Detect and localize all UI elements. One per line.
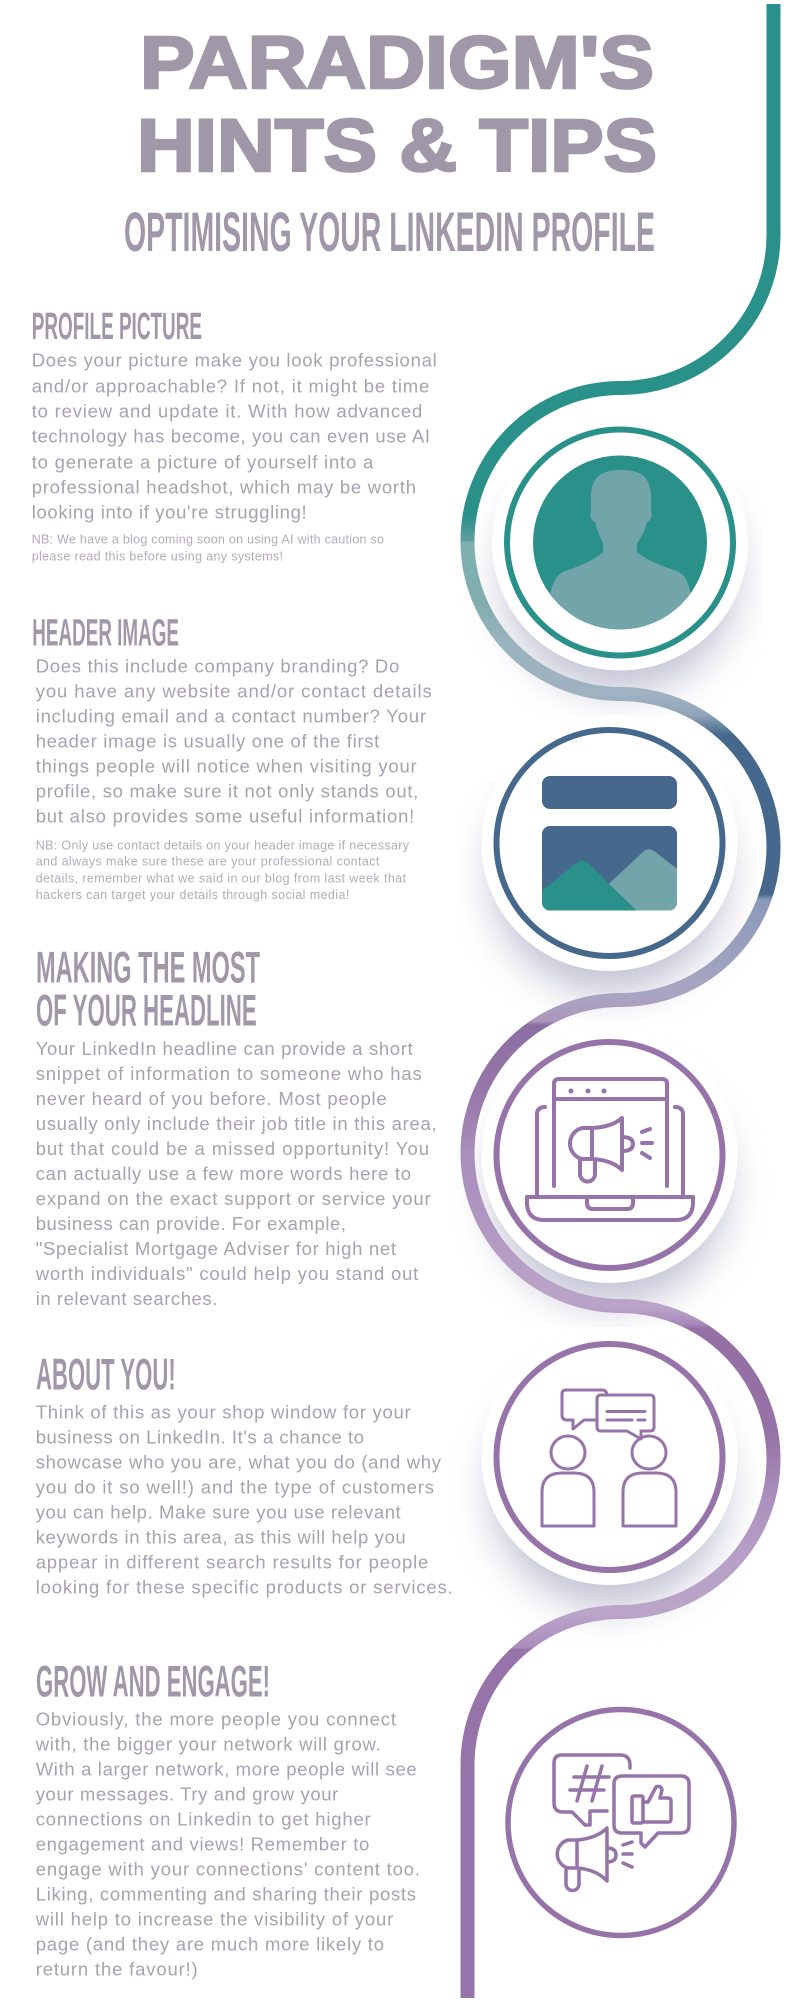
body text: grow and engage: with, the bigger your network will grow. <box>35 1734 381 1755</box>
body text: about you: keywords in this area, as this will help you <box>36 1526 406 1547</box>
body text: header image: you have any website and/or contact details <box>36 680 432 701</box>
body text: headline: can actually use a few more words here to <box>36 1163 411 1184</box>
body text: profile picture: professional headshot, which may be worth <box>32 476 416 497</box>
winding path <box>468 4 774 1998</box>
body text: grow and engage: will help to increase the visibility of your <box>35 1909 393 1930</box>
note: profile picture: NB: We have a blog coming soon on using AI with caution so <box>32 532 384 546</box>
panel: about you text <box>36 1350 453 1597</box>
panel: headline text <box>35 943 437 1309</box>
body text: header image: header image is usually one of the first <box>36 730 379 751</box>
body text: header image: but also provides some useful information! <box>36 805 414 826</box>
body text: profile picture: technology has become, you can even use AI <box>32 426 430 447</box>
body text: about you <box>36 1401 453 1597</box>
body text: about you: business on LinkedIn. It's a chance to <box>36 1426 364 1447</box>
body text: header image: including email and a contact number? Your <box>36 705 426 726</box>
body text: profile picture <box>32 350 437 522</box>
note: header image: details, remember what we said in our blog from last week that <box>36 871 407 885</box>
note: header image: NB: Only use contact details on your header image if necessary <box>36 838 410 852</box>
body text: grow and engage: Liking, commenting and sharing their posts <box>36 1884 416 1905</box>
icon: laptop with megaphone badge <box>482 1027 738 1283</box>
body text: headline: expand on the exact support or service your <box>36 1188 431 1209</box>
note: header image: and always make sure these are your professional contact <box>36 855 380 869</box>
body text: grow and engage: Obviously, the more people you connect <box>36 1709 396 1730</box>
body text: profile picture: to review and update it. With how advanced <box>32 400 422 421</box>
body text: grow and engage: your messages. Try and grow your <box>36 1784 338 1805</box>
panel: profile picture text: PROFILE PICTURE <box>32 306 202 348</box>
body text: headline: business can provide. For example, <box>36 1213 346 1234</box>
body text: headline: snippet of information to someone who has <box>36 1063 422 1084</box>
note: profile picture <box>32 532 384 563</box>
title <box>137 21 657 187</box>
panel: grow and engage text: GROW AND ENGAGE! <box>36 1658 270 1707</box>
title: HINTS & TIPS <box>137 104 657 187</box>
body text: profile picture: looking into if you're struggling! <box>32 501 307 522</box>
title: PARADIGM'S <box>140 21 654 104</box>
body text: headline: but that could be a missed opportunity! You <box>36 1138 429 1159</box>
body text: grow and engage: page (and they are much more likely to <box>36 1934 384 1955</box>
icon: profile silhouette badge <box>492 414 748 670</box>
panel: profile picture text <box>32 306 437 563</box>
body text: about you: looking for these specific products or services. <box>36 1576 453 1597</box>
body text: headline: never heard of you before. Most people <box>36 1088 387 1109</box>
heading: making the most of your headline: MAKING THE MOST <box>36 943 260 992</box>
panel: grow and engage text <box>35 1658 420 1980</box>
body text: grow and engage: With a larger network, more people will see <box>36 1759 417 1780</box>
note: profile picture: please read this before using any systems! <box>32 549 283 563</box>
disc shadows <box>492 456 738 1607</box>
icon: social engagement badge <box>508 1710 734 1936</box>
body text: grow and engage: connections on Linkedin to get higher <box>36 1809 371 1830</box>
body text: headline: worth individuals" could help you stand out <box>35 1263 418 1284</box>
body text: profile picture: to generate a picture of yourself into a <box>32 451 374 472</box>
panel: header image text <box>32 613 432 902</box>
body text: about you: Think of this as your shop window for your <box>36 1401 411 1422</box>
panel: header image text: HEADER IMAGE <box>32 613 179 655</box>
body text: grow and engage: return the favour!) <box>36 1959 198 1980</box>
body text: headline: usually only include their job title in this area, <box>36 1113 437 1134</box>
heading: making the most of your headline <box>36 943 260 1036</box>
icon: header image badge <box>482 715 738 971</box>
icon: two people talking badge <box>482 1329 738 1585</box>
body text: headline: "Specialist Mortgage Adviser for high net <box>36 1238 396 1259</box>
note: header image: hackers can target your details through social media! <box>36 888 349 902</box>
body text: grow and engage: engage with your connections' content too. <box>36 1859 420 1880</box>
body text: header image: things people will notice when visiting your <box>36 755 417 776</box>
note: header image <box>36 838 410 902</box>
body text: headline <box>35 1038 437 1309</box>
body text: about you: you can help. Make sure you use relevant <box>36 1501 401 1522</box>
body text: header image: Does this include company branding? Do <box>36 655 399 676</box>
heading: making the most of your headline: OF YOUR HEADLINE <box>36 987 257 1036</box>
body text: grow and engage <box>35 1709 420 1980</box>
panel: about you text: ABOUT YOU! <box>36 1350 176 1399</box>
body text: header image: profile, so make sure it not only stands out, <box>36 780 418 801</box>
body text: grow and engage: engagement and views! Remember to <box>36 1834 369 1855</box>
body text: about you: showcase who you are, what you do (and why <box>36 1451 442 1472</box>
body text: about you: you do it so well!) and the type of customers <box>36 1476 434 1497</box>
body text: headline: Your LinkedIn headline can provide a short <box>36 1038 413 1059</box>
body text: headline: in relevant searches. <box>36 1288 217 1309</box>
body text: header image <box>36 655 432 826</box>
body text: profile picture: and/or approachable? If not, it might be time <box>32 375 429 396</box>
body text: profile picture: Does your picture make you look professional <box>32 350 437 371</box>
body text: about you: appear in different search results for people <box>36 1551 428 1572</box>
